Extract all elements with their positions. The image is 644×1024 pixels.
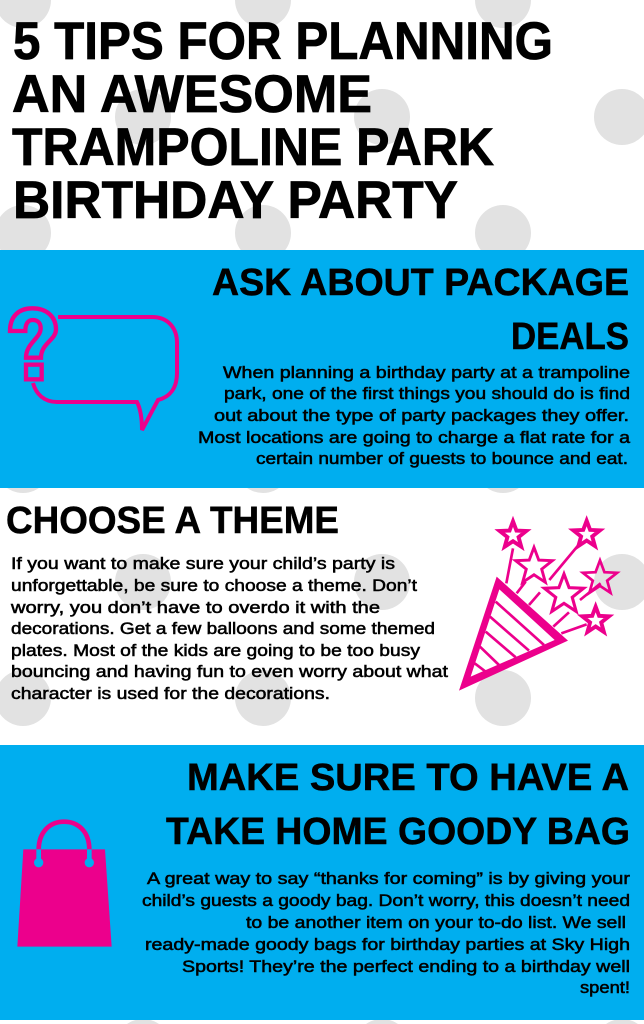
heading: ask about package deals: ASK ABOUT PACKAGE: [212, 262, 629, 304]
text block: goody bag body: spent!: [580, 978, 630, 997]
text block: theme body: If you want to make sure your child’s party is: [11, 554, 395, 573]
text block: package deals body: park, one of the first things you should do is find: [224, 384, 630, 403]
text block: package deals body: Most locations are going to charge a flat rate for a: [198, 428, 631, 447]
text block: package deals body: out about the type of party packages they offer.: [214, 406, 629, 425]
heading: make sure to have a take home goody bag: TAKE HOME GOODY BAG: [166, 811, 630, 853]
text block: theme body: decorations. Get a few balloons and some themed: [11, 619, 435, 638]
heading: make sure to have a take home goody bag: MAKE SURE TO HAVE A: [187, 757, 629, 799]
heading: ask about package deals: DEALS: [511, 316, 629, 358]
panel: take home goody bag: [0, 745, 644, 1020]
text block: package deals body: When planning a birthday party at a trampoline: [223, 363, 630, 382]
heading: choose a theme: CHOOSE A THEME: [6, 500, 339, 542]
text block: theme body: [10, 554, 448, 703]
title: [12, 12, 553, 230]
text block: package deals body: certain number of guests to bounce and eat.: [256, 449, 628, 468]
title: AN AWESOME: [12, 65, 372, 124]
title: BIRTHDAY PARTY: [13, 171, 458, 230]
panel: choose a theme: [6, 500, 617, 703]
text block: goody bag body: to be another item on your to-do list. We sell: [246, 913, 626, 932]
text block: goody bag body: A great way to say “thanks for coming” is by giving your: [147, 869, 630, 888]
text block: package deals body: [198, 363, 631, 468]
text block: theme body: bouncing and having fun to even worry about what: [11, 662, 448, 681]
text block: theme body: plates. Most of the kids are going to be too busy: [11, 641, 421, 660]
text block: theme body: worry, you don’t have to overdo it with the: [10, 598, 380, 617]
title: TRAMPOLINE PARK: [12, 118, 494, 177]
icon: goody bag: [17, 822, 112, 947]
icon: speech bubble with question mark: [10, 308, 177, 430]
title: 5 TIPS FOR PLANNING: [13, 12, 553, 71]
text block: theme body: unforgettable, be sure to choose a theme. Don’t: [11, 576, 417, 595]
text block: goody bag body: [142, 869, 630, 997]
panel: ask about package deals: [0, 250, 644, 488]
heading: ask about package deals: [212, 262, 629, 358]
text block: theme body: character is used for the decorations.: [11, 684, 330, 703]
text block: goody bag body: Sports! They’re the perfect ending to a birthday well: [182, 957, 630, 976]
text block: goody bag body: child’s guests a goody bag. Don’t worry, this doesn’t need: [142, 891, 630, 910]
text block: goody bag body: ready-made goody bags for birthday parties at Sky High: [145, 935, 630, 954]
heading: make sure to have a take home goody bag: [166, 757, 630, 853]
icon: party popper with stars: [459, 521, 617, 691]
